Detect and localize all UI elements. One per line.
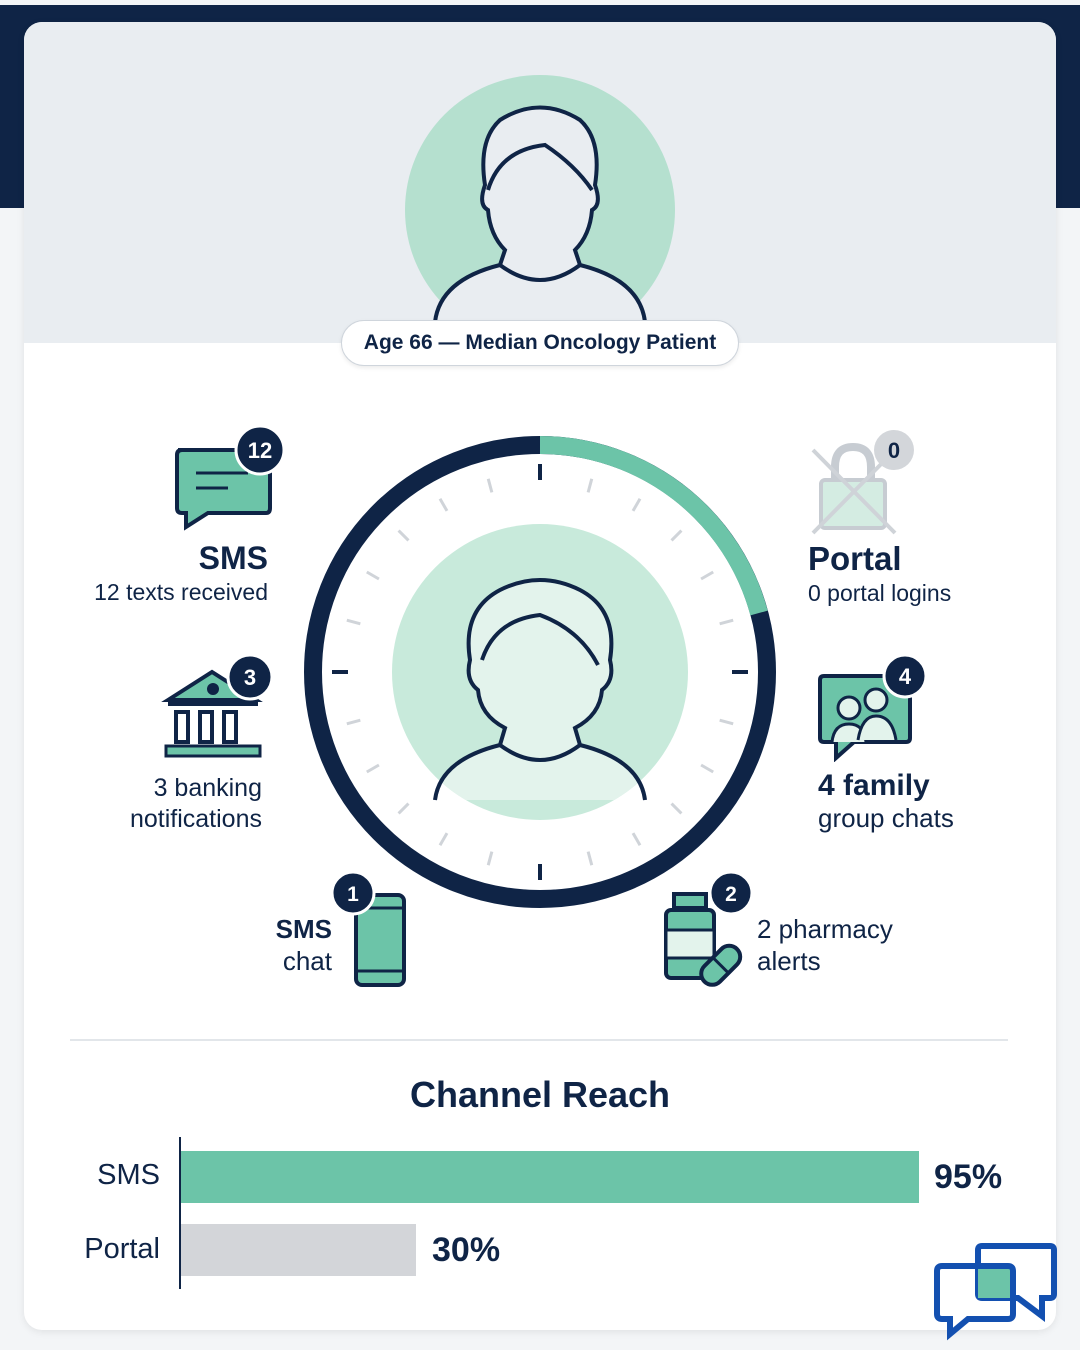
icon: bank — [161, 656, 270, 758]
text: pharmacy: 2 pharmacy — [757, 914, 893, 944]
text: SMS chat: chat — [283, 946, 332, 976]
text: Portal — [808, 540, 951, 606]
bar chart: SMS — [97, 1159, 160, 1191]
heading: Channel Reach: Channel Reach — [410, 1074, 670, 1115]
bar chart: Portal — [84, 1233, 160, 1265]
pill label: Age 66 — Median Oncology Patient — [364, 331, 716, 354]
icon: SMS bubble — [175, 428, 282, 531]
icon: pharmacy: 2 — [725, 883, 737, 906]
icon: portal lock — [812, 430, 914, 534]
text: Portal: Portal — [808, 540, 902, 577]
text: family: group chats — [818, 803, 954, 833]
text: SMS: 12 texts received — [94, 579, 268, 605]
text: SMS — [94, 540, 268, 605]
header avatar and clock — [304, 75, 776, 908]
icon: pharmacy — [664, 874, 750, 987]
bar chart — [84, 1137, 1002, 1289]
text: pharmacy — [757, 914, 893, 976]
clock — [313, 445, 767, 899]
text: SMS chat: SMS — [276, 914, 332, 944]
text: family: 4 family — [818, 769, 930, 802]
text: family — [818, 769, 954, 833]
icon: phone — [334, 874, 406, 987]
text: banking: notifications — [130, 805, 262, 833]
icon: SMS bubble: 12 — [248, 438, 272, 463]
text: banking: 3 banking — [154, 774, 262, 802]
top navy band — [0, 5, 1080, 208]
icon: chat logo — [934, 1243, 1057, 1340]
text: Portal: 0 portal logins — [808, 580, 951, 606]
bar chart: 95% — [934, 1158, 1002, 1196]
bar chart: 30% — [432, 1231, 500, 1269]
icon: bank: 3 — [244, 665, 256, 690]
text: pharmacy: alerts — [757, 946, 821, 976]
text: SMS chat — [276, 914, 332, 976]
icon: family chat: 4 — [899, 664, 912, 689]
icon: family chat — [818, 656, 924, 762]
icon: portal lock: 0 — [888, 438, 900, 463]
text: banking — [130, 774, 262, 833]
text: SMS: SMS — [199, 540, 268, 576]
pill label — [341, 320, 739, 366]
icon: phone: 1 — [347, 883, 359, 906]
